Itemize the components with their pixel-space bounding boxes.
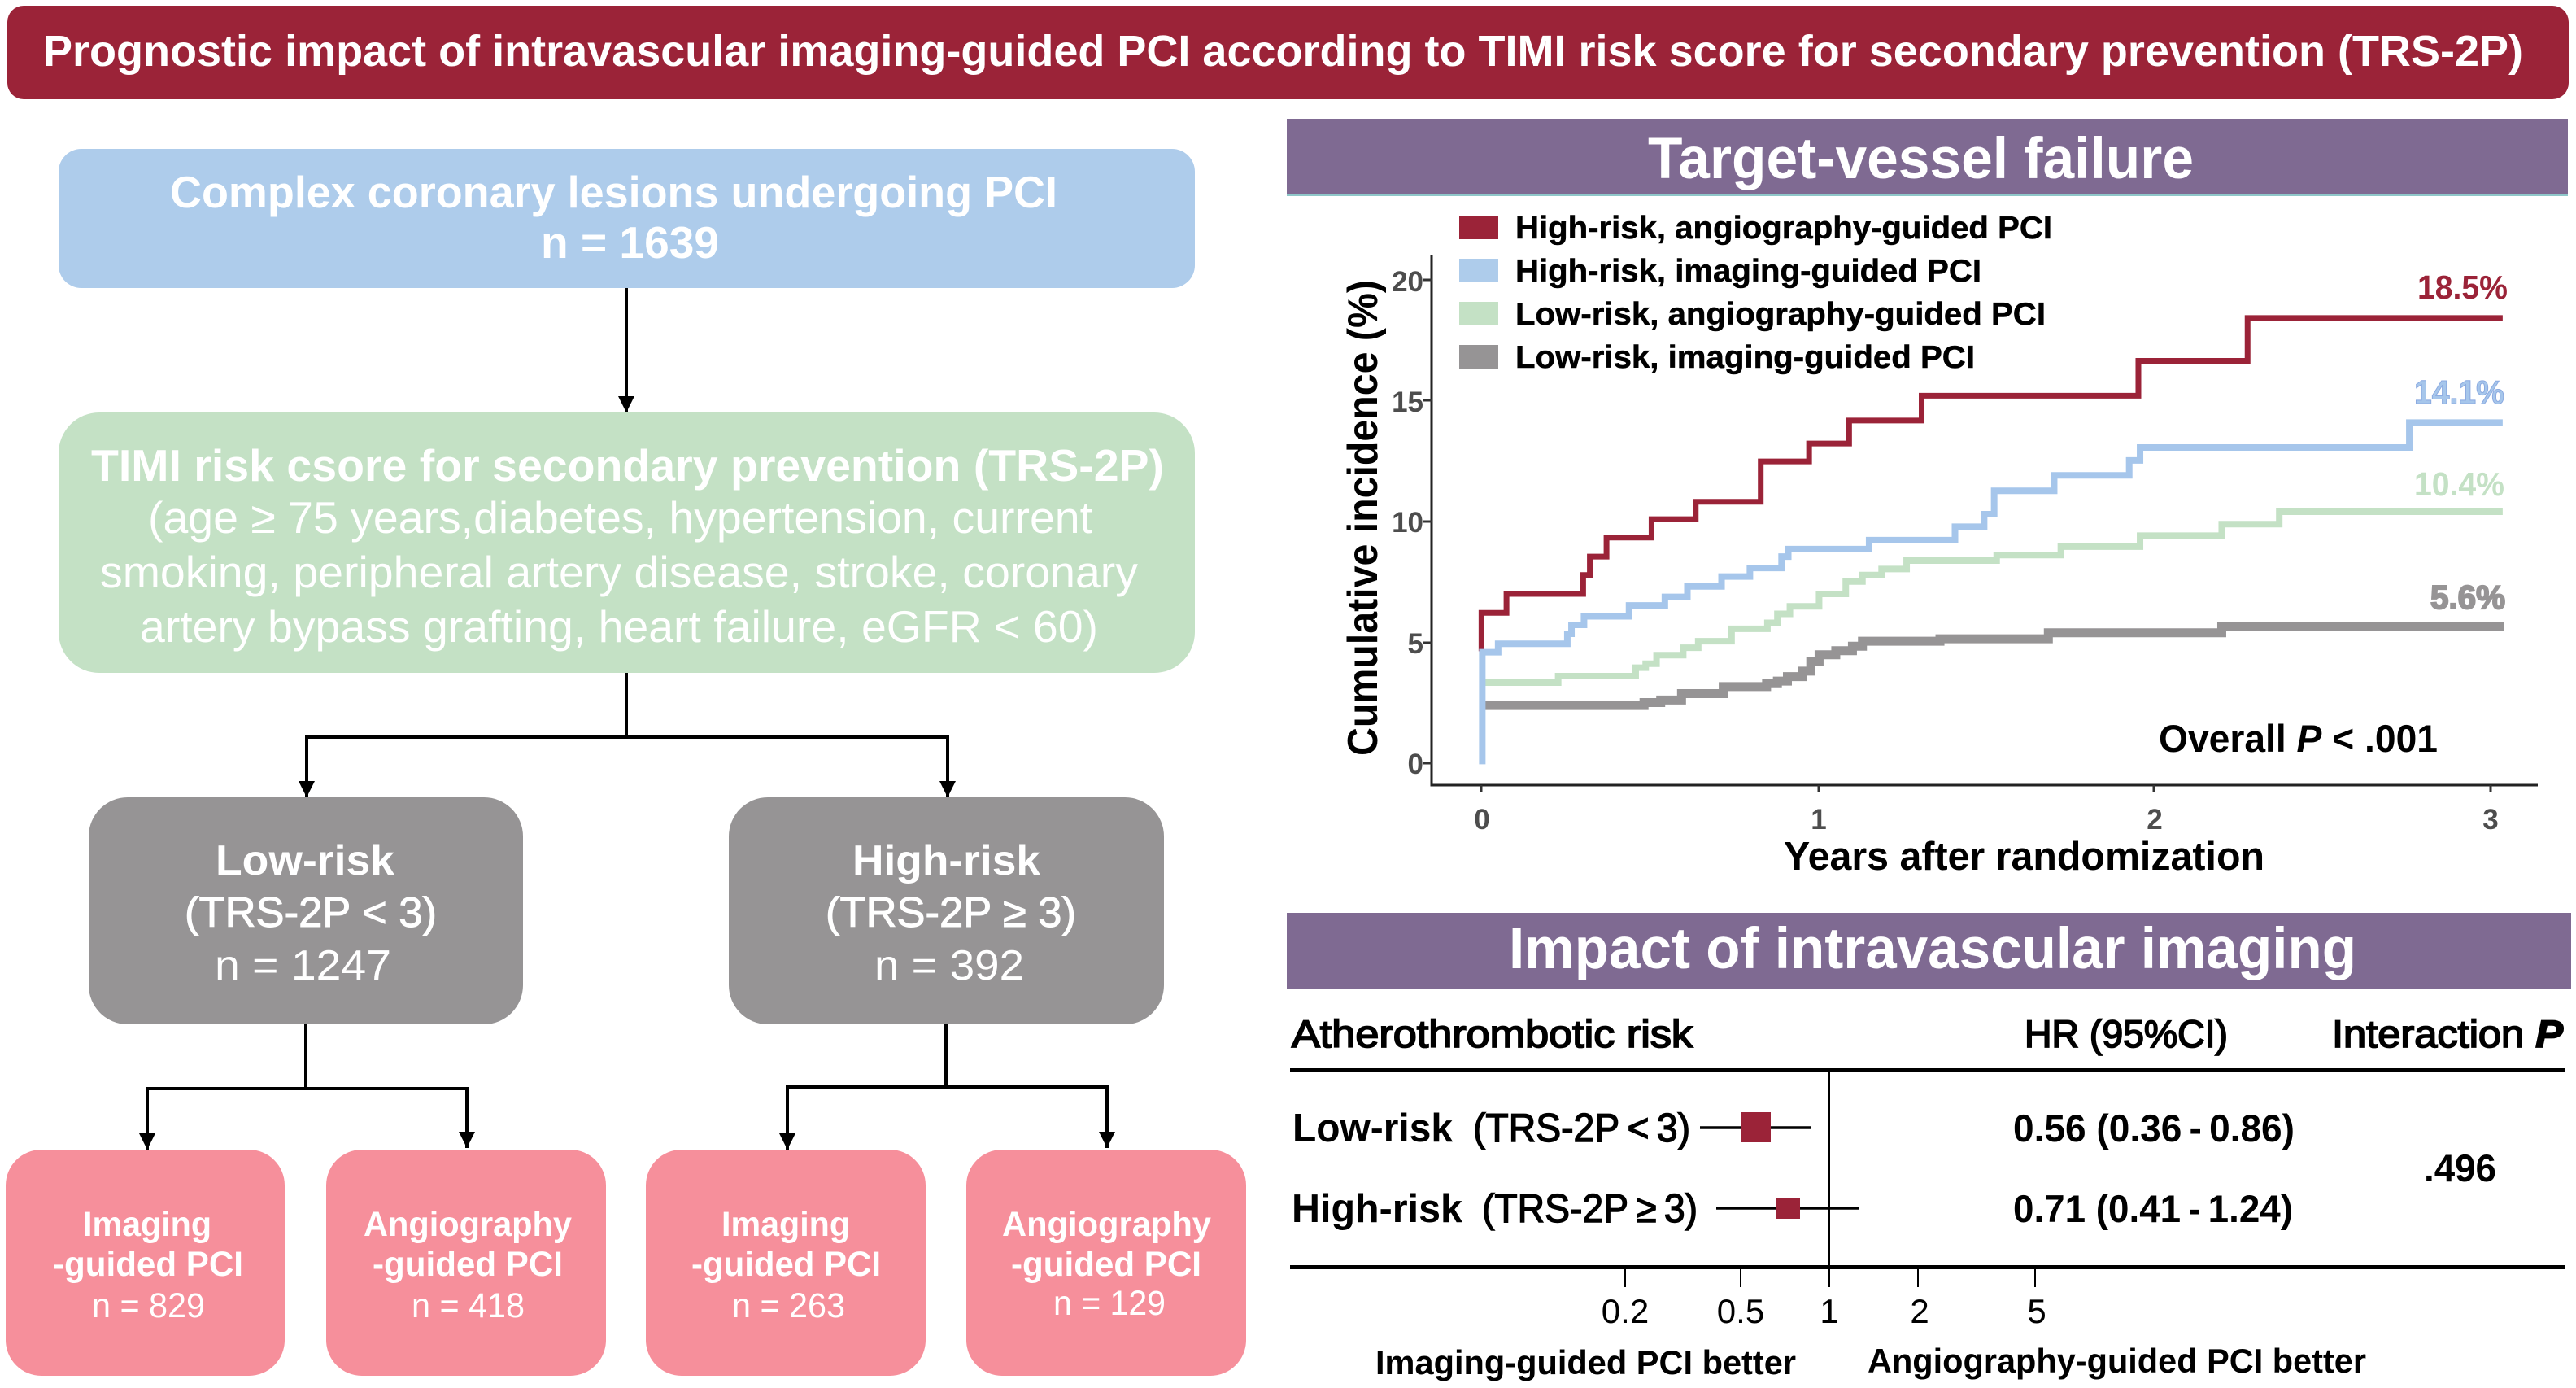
box: low-risk: Low-risk [216,837,394,884]
hazard ratio axis labels: 0.2 [1602,1292,1649,1330]
x-axis tick labels: 2 [2147,804,2163,836]
box: high-risk angiography-guided PCI [966,1150,1246,1376]
arrows: low-risk to treatment arms [147,1024,467,1150]
box: low-risk [89,797,523,1024]
x-axis tick labels: 3 [2482,804,2499,836]
heading: impact of intravascular imaging [1287,913,2571,989]
forest plot table [1290,1012,2565,1381]
table header [1292,1012,2564,1055]
y-axis tick labels: 10 [1392,507,1423,539]
table header: Interaction P [2332,1012,2564,1055]
legend: Low-risk, angiography-guided PCI [1515,297,2046,332]
end value labels [2414,268,2508,616]
y-axis tick labels: 0 [1408,749,1423,780]
hazard ratio axis labels: 2 [1910,1292,1929,1330]
hazard ratio axis labels: 1 [1820,1292,1839,1330]
x-axis tick labels [1474,804,2499,836]
box: low-risk angiography-guided PCI: Angiography [364,1205,572,1244]
title banner [7,6,2569,99]
interaction p value: .496 [2424,1146,2496,1189]
heading: impact of intravascular imaging: Impact of intravascular imaging [1509,917,2356,981]
box: low-risk: n = 1247 [215,942,391,989]
row: high-risk: (TRS-2P ≥ 3) [1482,1187,1698,1231]
box: complex coronary lesions: Complex coronary lesions undergoing PCI [170,167,1057,217]
box: complex coronary lesions [59,149,1195,288]
box: high-risk angiography-guided PCI: -guided PCI [1011,1245,1201,1284]
row: low-risk: (TRS-2P < 3) [1473,1106,1690,1150]
box: TIMI risk score definition: TIMI risk csore for secondary prevention (TRS-2P) [91,440,1164,491]
table header: Atherothrombotic risk [1292,1012,1693,1055]
direction label: angiography better: Angiography-guided PCI better [1868,1342,2366,1380]
box: TIMI risk score definition: (age ≥ 75 years,diabetes, hypertension, current [148,492,1092,543]
x-axis title: Years after randomization [1784,835,2264,879]
box: high-risk angiography-guided PCI: n = 129 [1053,1284,1166,1323]
table header: HR (95%CI) [2025,1012,2228,1055]
heading: target-vessel failure: Target-vessel failure [1648,127,2194,191]
legend: High-risk, imaging-guided PCI [1515,254,1981,289]
box: high-risk: (TRS-2P ≥ 3) [826,889,1076,936]
end value labels: 18.5% [2417,268,2508,306]
box: high-risk imaging-guided PCI: Imaging [721,1205,850,1244]
box: low-risk angiography-guided PCI [326,1150,606,1376]
box: low-risk imaging-guided PCI: n = 829 [92,1286,205,1325]
end value labels: 10.4% [2414,465,2504,503]
row: high-risk: 0.71 (0.41 - 1.24) [2013,1187,2293,1230]
end value labels: 5.6% [2430,578,2505,616]
box: low-risk imaging-guided PCI: -guided PCI [53,1245,243,1284]
box: TIMI risk score definition: artery bypass grafting, heart failure, eGFR < 60) [140,601,1098,652]
box: low-risk: (TRS-2P < 3) [185,889,437,936]
box: high-risk: n = 392 [874,942,1024,989]
box: high-risk imaging-guided PCI: -guided PCI [691,1245,881,1284]
y-axis tick labels: 20 [1392,266,1423,298]
arrows: split into risk groups [307,673,948,797]
hazard ratio axis labels: 5 [2027,1292,2046,1330]
step curves [1481,318,2504,764]
row: low-risk: Low-risk [1292,1106,1454,1150]
x-axis tick labels: 0 [1474,804,1490,836]
hazard ratio axis labels: 0.5 [1717,1292,1764,1330]
box: low-risk imaging-guided PCI: Imaging [83,1205,211,1244]
legend [1459,211,2052,375]
y-axis tick labels [1392,266,1423,780]
hazard ratio axis labels [1602,1292,2046,1330]
row: low-risk [1292,1106,2295,1150]
box: low-risk imaging-guided PCI [6,1150,285,1376]
row: low-risk: 0.56 (0.36 - 0.86) [2013,1106,2295,1150]
box: high-risk imaging-guided PCI: n = 263 [732,1286,845,1325]
box: TIMI risk score definition [59,412,1195,673]
legend: High-risk, angiography-guided PCI [1515,211,2052,246]
flowchart panel [6,149,1246,1376]
heading: target-vessel failure [1287,119,2568,196]
y-axis tick labels: 15 [1392,386,1423,418]
row: high-risk [1292,1187,2293,1231]
box: complex coronary lesions: n = 1639 [541,217,719,268]
legend: Low-risk, imaging-guided PCI [1515,340,1975,375]
row: high-risk: High-risk [1292,1187,1463,1231]
arrow: population to TRS-2P [625,288,628,412]
box: low-risk angiography-guided PCI: -guided PCI [373,1245,563,1284]
y-axis title: Cumulative incidence (%) [1340,280,1387,756]
box: high-risk [729,797,1164,1024]
box: high-risk angiography-guided PCI: Angiography [1002,1205,1211,1244]
box: high-risk imaging-guided PCI [646,1150,926,1376]
y-axis tick labels: 5 [1408,628,1423,660]
box: TIMI risk score definition: smoking, peripheral artery disease, stroke, coronary [100,547,1138,597]
x-axis tick labels: 1 [1811,804,1827,836]
direction label: imaging better: Imaging-guided PCI better [1375,1343,1796,1381]
arrows: high-risk to treatment arms [787,1024,1107,1150]
end value labels: 14.1% [2414,373,2504,411]
axes [1423,255,2538,792]
overall p value: Overall P < .001 [2159,717,2438,760]
box: high-risk: High-risk [852,837,1040,884]
title banner: Prognostic impact of intravascular imaging-guided PCI according to TIMI risk score for secondary prevention (TRS-2P) [43,27,2523,76]
box: low-risk angiography-guided PCI: n = 418 [412,1286,525,1325]
chart: cumulative incidence curves [1340,211,2538,879]
rules and axis lines [1290,1068,2565,1287]
